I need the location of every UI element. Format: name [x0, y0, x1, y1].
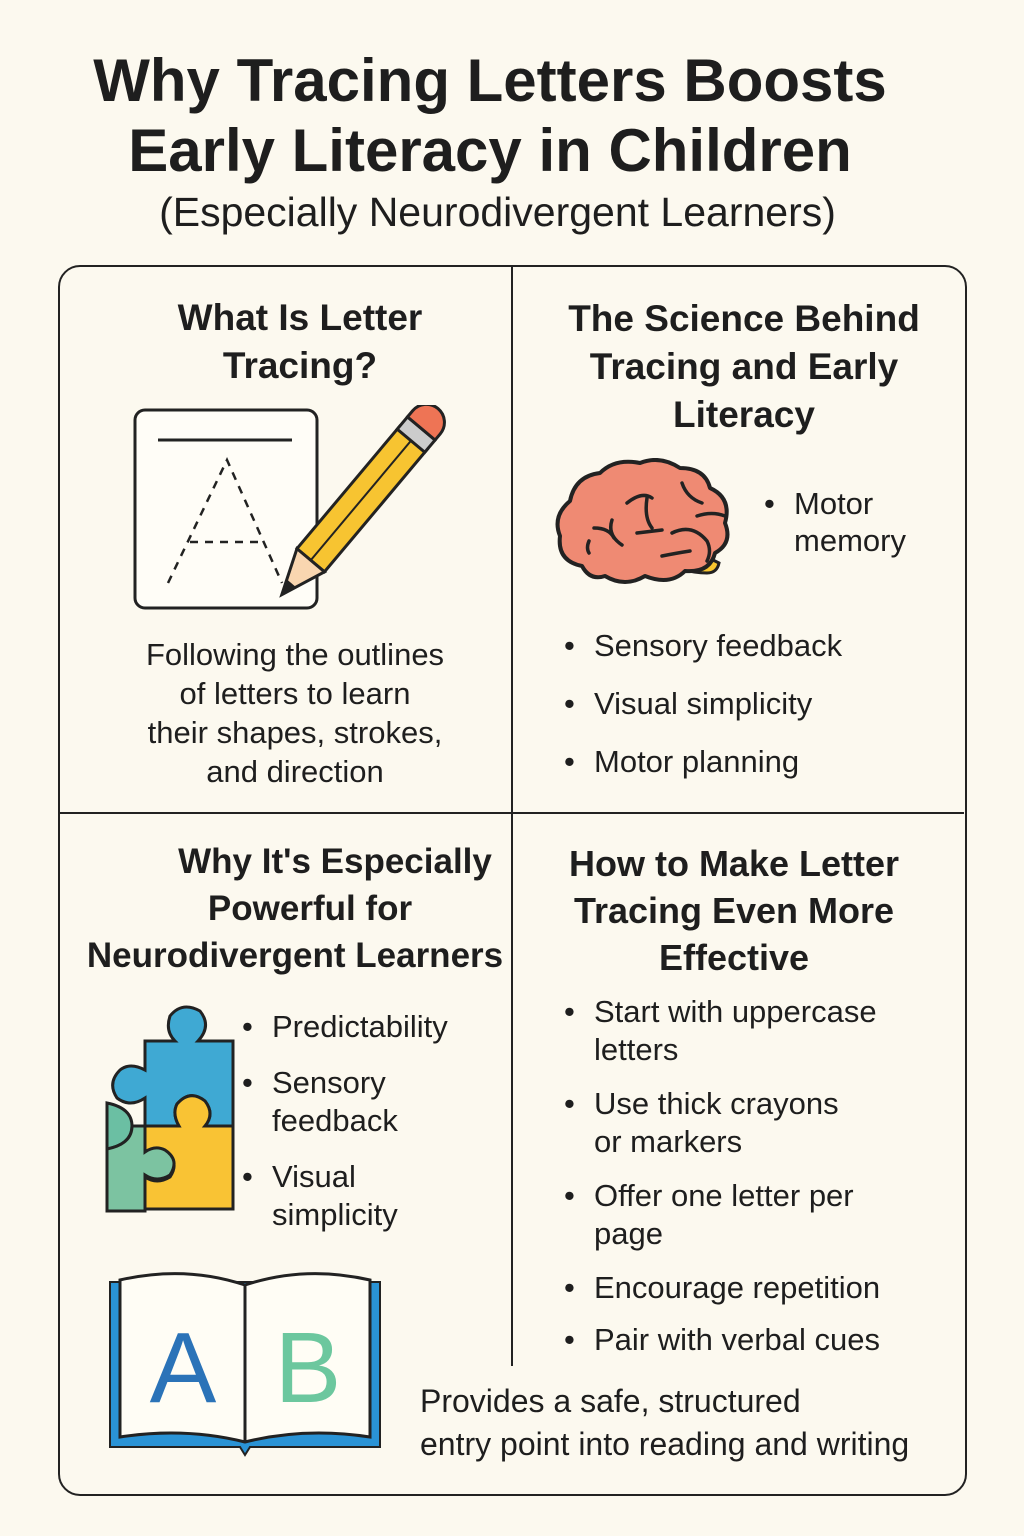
panel: how to make effective [565, 843, 899, 1357]
list: simplicity [272, 1197, 398, 1232]
list: Sensory feedback [594, 628, 842, 663]
list: motor memory: Motor [794, 486, 873, 521]
closing statement [420, 1383, 909, 1462]
icon: brain [556, 458, 730, 584]
closing statement: entry point into reading and writing [420, 1426, 909, 1462]
description: Following the outlines [146, 637, 444, 672]
title: Early Literacy in Children [128, 117, 852, 184]
list: Use thick crayons [594, 1086, 839, 1121]
list [565, 994, 880, 1357]
closing statement: Provides a safe, structured [420, 1383, 801, 1419]
list: Sensory [272, 1065, 386, 1100]
icon: book AB: B [275, 1312, 341, 1424]
list: page [594, 1216, 663, 1251]
heading: Why It's Especially [178, 842, 492, 881]
list: letters [594, 1032, 678, 1067]
list: Offer one letter per [594, 1178, 854, 1213]
list [243, 1009, 448, 1232]
icon: book AB: A [150, 1312, 217, 1424]
list: Start with uppercase [594, 994, 877, 1029]
heading [178, 297, 422, 386]
icon: puzzle [106, 1006, 234, 1212]
list: Pair with verbal cues [594, 1322, 880, 1357]
heading: Neurodivergent Learners [87, 936, 503, 975]
description: of letters to learn [180, 676, 410, 711]
list: feedback [272, 1103, 398, 1138]
list: Encourage repetition [594, 1270, 880, 1305]
list: Motor planning [594, 744, 799, 779]
heading: What Is Letter [178, 297, 422, 338]
list: Predictability [272, 1009, 448, 1044]
icon: tracing paper and pencil [134, 405, 446, 610]
heading: The Science Behind [568, 298, 920, 339]
main frame [58, 265, 967, 1496]
list: Visual [272, 1159, 356, 1194]
list: Visual simplicity [594, 686, 812, 721]
list: motor memory: memory [794, 523, 906, 558]
subtitle: (Especially Neurodivergent Learners) [159, 189, 836, 235]
heading [87, 842, 503, 975]
heading [569, 843, 899, 978]
panel: science [556, 298, 920, 779]
panel: neurodivergent [87, 842, 503, 1457]
heading: Tracing? [223, 345, 377, 386]
heading: How to Make Letter [569, 843, 899, 884]
description [146, 637, 444, 789]
heading: Powerful for [208, 889, 412, 928]
list [565, 628, 842, 779]
list: or markers [594, 1124, 742, 1159]
heading: Tracing and Early [590, 346, 898, 387]
heading [568, 298, 920, 435]
icon: book AB [109, 1272, 381, 1457]
list: motor memory [765, 486, 906, 558]
panel: what is letter tracing [134, 297, 446, 789]
title: Why Tracing Letters Boosts [93, 47, 887, 114]
title [93, 47, 887, 184]
heading: Literacy [673, 394, 815, 435]
heading: Tracing Even More [574, 890, 894, 931]
description: their shapes, strokes, [148, 715, 442, 750]
heading: Effective [659, 937, 809, 978]
description: and direction [206, 754, 384, 789]
